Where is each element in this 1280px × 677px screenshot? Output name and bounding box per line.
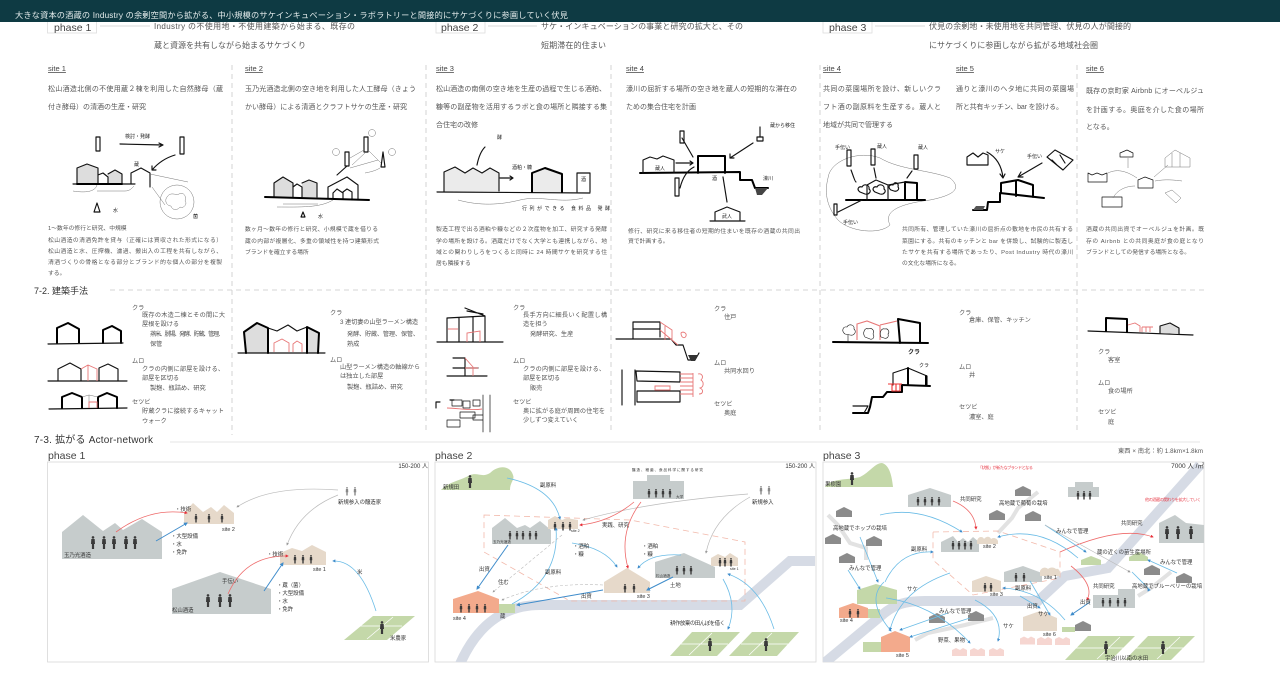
phase 3 site 4 sketch: 手伝い: [835, 144, 850, 151]
site 3 description: 松山酒造の南側の空き地を生産の過程で生じる酒粕、: [436, 84, 606, 93]
method text: site 3: 少しずつ変えていく: [523, 416, 578, 424]
building: 松山酒造: [172, 572, 271, 614]
site 1 notes: 1〜数年の修行と研究、中規模: [48, 224, 127, 232]
method sketch: phase 3 site 6: [1088, 318, 1193, 335]
site 1 notes: [48, 224, 222, 277]
scale note: 東西 × 南北：約 1.8km×1.8km: [1118, 447, 1203, 455]
river: [822, 465, 1200, 665]
flow labels: ・糠: [642, 550, 653, 558]
site buildings: [839, 536, 1148, 656]
phase 3 site 6 description: を計画する。奥庭を介した食の場所: [1086, 105, 1204, 114]
flow labels: [833, 495, 1203, 659]
site 4 notes: [628, 227, 800, 245]
building: site 2: site 2: [571, 529, 580, 533]
site 3 sketch: 行列ができる 食料品 発酵: [522, 205, 610, 212]
site 2 sketch: 水: [318, 213, 323, 220]
method text: site 3: クラ: [513, 305, 525, 312]
resource labels: ・技術: [267, 550, 284, 558]
flow labels: 実践、研究: [602, 521, 630, 529]
small houses: [825, 486, 1192, 631]
resource labels: ・免許: [277, 605, 294, 613]
method text: site 3: クラの内側に部屋を設ける、: [523, 365, 605, 373]
resource labels: ・技術: [175, 505, 192, 513]
phase 3 site 5 description: site 5: [956, 64, 974, 73]
building: site 1: [280, 545, 326, 573]
method text: phase 3 site 5: 濃室、庭: [969, 413, 994, 421]
phase 3 site 4 sketch: [826, 143, 956, 231]
method text: site 3: ムロ: [513, 358, 525, 365]
field: 米農家: [344, 616, 415, 642]
building: 玉乃光酒造: [492, 518, 551, 544]
flow labels: site 4: [840, 618, 853, 624]
building: 大学: 醸造、細菌、食品科学に関する研究: [632, 467, 703, 472]
method text: site 1: 屋根を設ける: [142, 320, 179, 328]
site 2 notes: 数ヶ月〜数年の修行と研究、小規模で蔵を借りる: [245, 225, 378, 233]
method text: phase 3 site 6: ムロ: [1098, 380, 1110, 387]
method text: site 2: 製麹、瓶詰め、研究: [347, 383, 403, 391]
site 2 sketch: [265, 130, 396, 220]
phase 3 site 4 sketch: 手伝い: [843, 219, 858, 226]
hill: 新規田: 新規田: [443, 483, 459, 491]
flow labels: サケ: [1038, 611, 1049, 618]
method text: site 1: クラ: [132, 305, 144, 312]
resource labels: ・水: [171, 540, 182, 548]
heading: 7-3: 7-3. 拡がる Actor-network: [34, 433, 154, 446]
building: 松山酒造: [655, 553, 715, 578]
site 2 notes: ブランドを確立する場所: [245, 248, 309, 256]
building: 大学: 大学: [676, 494, 684, 499]
hill: 果樹園: [825, 463, 893, 488]
panel: phase 3 network: [822, 450, 1204, 665]
flow labels: ・酒粕: [642, 542, 658, 550]
method text: site 4: クラ: [714, 306, 726, 313]
title bar: [0, 0, 1280, 22]
phase 3 site 6 description: となる。: [1086, 123, 1114, 131]
phase 3 site 4 sketch: 蔵人: [918, 144, 928, 151]
phase 3 site 4 description: フト酒の副原料を生産する。蔵人と: [823, 102, 941, 111]
method text: site 1: 蒸米、脱場、発酵、貯蔵、管理、: [150, 330, 224, 338]
terraced paths: [828, 492, 1171, 640]
resource labels: 米: [357, 568, 363, 576]
site 4 sketch: 酒: [712, 175, 717, 182]
site 1 notes: 松山酒造の清酒免許を貸与（正確には買収された形式になる）: [48, 236, 222, 244]
method text: site 3: 奥に拡がる庭が周囲の住宅を: [523, 407, 605, 415]
method text: phase 3 site 5: クラ: [959, 310, 971, 317]
site 4 sketch: 蔵人: [655, 165, 665, 172]
site 2 description: かい酵母）による清酒とクラフトサケの生産・研究: [245, 102, 407, 111]
method sketches: site 3: [436, 308, 503, 432]
phase 2 header: [436, 18, 743, 50]
method text: site 2: クラ: [330, 310, 342, 317]
hill: 果樹園: 果樹園: [825, 480, 841, 488]
method text: site 1: 貯蔵クラに接続するキャット: [142, 407, 224, 415]
flow labels: site 5: [896, 653, 909, 659]
fields: [1065, 636, 1195, 662]
phase 3 site 4 description: [823, 64, 941, 129]
site 4 sketch: 武人: [722, 213, 732, 220]
heading: 7-2: 7-2. 建築手法: [34, 285, 88, 296]
phase 2 header: phase 2: [441, 22, 479, 34]
site 4 description: site 4: [626, 64, 644, 73]
site 1 description: 松山酒造北側の不使用蔵２棟を利用した自然酵母（蔵: [48, 84, 223, 93]
site 2 description: 玉乃光酒造北側の空き地を利用した人工酵母（きょう: [245, 84, 416, 93]
site 3 notes: 域との関わりしろをつくると同時に 24 時間サケを研究する住: [436, 248, 607, 256]
flow labels: 共同研究: [1093, 582, 1115, 590]
phase 3 site 4 description: site 4: [823, 64, 841, 73]
method text: phase 3 site 6: 食の場所: [1108, 387, 1133, 395]
method text: site 3: 販売: [530, 384, 542, 392]
hill: 新規田: [441, 467, 513, 491]
panel: phase 2 network: phase 2: [435, 450, 473, 462]
phase 3 site 6 notes: ブランドとしての発信する場所となる。: [1086, 248, 1190, 256]
building: 松山酒造: 手伝い: [222, 577, 238, 585]
phase 3 site 5 notes: の文化な場所になる。: [902, 259, 960, 267]
flow labels: みんなで管理: [849, 564, 882, 572]
panel: phase 3 network: 「状態」が新たなブランドとなる: [978, 464, 1033, 471]
building: site 2: [548, 516, 580, 533]
flow labels: みんなで管理: [939, 607, 972, 615]
method text: site 1: ウォーク: [142, 417, 167, 425]
phase 3 site 4 description: 共同の菜園場所を設け、新しいクラ: [823, 84, 941, 93]
panel: phase 3 network: phase 3: [823, 450, 861, 462]
site 3 notes: 製造工程で出る酒粕や糠などの２次産物を加工、研究する発酵: [436, 225, 607, 233]
flow labels: site 3: [990, 592, 1003, 598]
site 4 sketch: 濠川: [763, 175, 773, 182]
phase 3 site 5 notes: 共同所有、管理していた濠川の屈折点の敷地を市民の共有する: [902, 225, 1073, 233]
building: site 1: site 1: [313, 567, 326, 573]
method text: site 2: ムロ: [330, 357, 342, 364]
method text: site 2: 熟成: [347, 340, 359, 348]
method text: site 4: セツビ: [714, 400, 733, 408]
network arrows: [116, 489, 376, 611]
site 4 sketch: 蔵から移住: [770, 122, 795, 129]
building: 松山酒造: 松山酒造: [172, 606, 194, 614]
phase 1 header: [48, 18, 355, 50]
building: 松山酒造: 松山酒造: [656, 573, 671, 578]
phase 3 site 5 notes: たサケを共有する場所であったり、Post Industry 時代の濠川: [902, 248, 1073, 256]
panel: phase 2 network: [435, 450, 816, 664]
resource labels: ・大型設備: [277, 589, 305, 597]
flow labels: ・酒粕: [573, 542, 589, 550]
dashed boundary: [933, 531, 1060, 595]
fields: 宇治川以南の水田: [1105, 654, 1148, 662]
site 1 sketch: 蔵: [134, 161, 139, 168]
phase 3 site 6 description: [1086, 64, 1204, 131]
flow labels: 蔵の近くの苗生産場所: [1097, 548, 1152, 556]
site 1 sketch: 水: [113, 207, 118, 214]
method text: site 1: ムロ: [132, 358, 144, 365]
people: 新規参入: 新規参入: [752, 498, 774, 506]
field: 米農家: 米農家: [390, 634, 407, 642]
flow labels: 住む: [498, 578, 509, 586]
site 1 notes: 松山酒造と水、圧搾機、濾過、搬出入の工程を共有しながら、: [48, 247, 222, 255]
site 4 notes: 資で計画する。: [628, 237, 669, 245]
building: site 1: [711, 553, 739, 571]
flow labels: みんなで管理: [1056, 527, 1089, 535]
method text: site 4: [714, 306, 755, 417]
flow labels: ・糠: [573, 550, 584, 558]
site 2 description: [245, 64, 416, 111]
method text: site 3: セツビ: [513, 398, 532, 406]
phase 1 header: 蔵と資源を共有しながら始まるサケづくり: [154, 40, 306, 50]
site 3 description: [436, 64, 607, 129]
flow labels: 出資: [1027, 602, 1038, 610]
panel: phase 2 network: 150-200 人: [785, 463, 815, 470]
site 3 sketch: 酵: [497, 135, 502, 141]
phase 3 site 6 notes: 存の Airbnb との共同奥庭が食の庭となり: [1086, 237, 1204, 245]
resource labels: ・大型設備: [171, 532, 199, 540]
phase 3 header: [823, 18, 1131, 50]
flow labels: 副原料: [911, 545, 928, 553]
site 1 sketch: 菌: [193, 213, 198, 220]
phase 3 site 6 sketch: [1088, 150, 1190, 207]
phase 3 site 6 description: site 6: [1086, 64, 1104, 73]
phase 3 header: 伏見の余剰地・未使用地を共同管理、伏見の人が間接的: [929, 21, 1131, 31]
method text: site 3: 長手方向に細長いく配置し構: [523, 311, 607, 319]
title bar: 大きな資本の酒蔵の Industry の余剰空間から拡がる、中小規模のサケインキュベーション・ラボラトリーと間接的にサケづくりに参画していく伏見: [15, 10, 568, 20]
phase 3 site 4 sketch: 蔵人: [877, 143, 887, 150]
phase 3 site 5 sketch: サケ: [995, 148, 1005, 155]
building: site 4: site 4: [453, 616, 466, 622]
method text: site 2: 3 連切妻の山型ラーメン構造: [340, 318, 418, 326]
耕作地 dashed boundary: [484, 515, 745, 601]
phase 3 site 5 notes: 菜園にする。共有のキッチンと bar を併設し、試験的に製造し: [902, 237, 1073, 245]
building: 玉乃光酒造: 玉乃光酒造: [64, 551, 92, 559]
method sketches: phase 3 site 5: クラ: [919, 363, 929, 369]
site 2 notes: 蔵の内部が複層化、多重の領域性を持つ建築形式: [245, 237, 379, 245]
site 4 description: 濠川の屈折する場所の空き地を蔵人の短期的な滞在の: [626, 84, 797, 93]
fields: [670, 632, 799, 656]
site 4 description: [626, 64, 797, 111]
site 3 description: 合住宅の改修: [436, 120, 478, 129]
building: site 2: [184, 503, 235, 533]
method text: phase 3 site 5: 倉庫、保管、キッチン: [969, 316, 1031, 324]
phase 3 site 5 sketch: [967, 148, 1073, 210]
method text: phase 3 site 6: 客室: [1108, 356, 1120, 364]
panel: phase 1 network: 150-200 人: [398, 463, 428, 470]
site 4 sketch: [640, 122, 795, 221]
method text: site 2: は独立した部屋: [340, 372, 383, 380]
site 3 notes: 居も隣接する: [436, 259, 471, 267]
panel: phase 1 network: [48, 450, 428, 662]
building: 玉乃光酒造: [62, 515, 162, 559]
panel: phase 1 network: phase 1: [48, 450, 86, 462]
site 1 description: site 1: [48, 64, 66, 73]
method text: phase 3 site 5: [959, 310, 1031, 421]
site 3 description: site 3: [436, 64, 454, 73]
method text: site 1: 既存の木造二棟とその間に大: [142, 311, 225, 319]
flow labels: site 6: [1043, 632, 1056, 638]
flow labels: site 1: [1044, 575, 1057, 581]
method text: site 1: [132, 305, 225, 425]
site 1 description: [48, 64, 223, 111]
method text: site 2: 山型ラーメン構造の軸線から: [340, 363, 420, 371]
phase 2 header: サケ・インキュベーションの事業と研究の拡大と、その: [541, 21, 743, 31]
method text: site 1: 部屋を区切る: [142, 374, 179, 382]
site 1 sketch: 検討・発酵: [125, 133, 150, 140]
flow labels: 共同研究: [960, 495, 982, 503]
phase 3 site 5 description: 通りと濠川のヘタ地に共同の菜園場: [956, 84, 1074, 93]
method text: phase 3 site 6: セツビ: [1098, 408, 1117, 416]
phase 2 header: 短期滞在的住まい: [541, 40, 606, 50]
resource labels: [171, 505, 363, 613]
method text: site 2: 発酵、貯蔵、管理、保管、: [347, 330, 419, 338]
flow labels: site 2: [983, 544, 996, 550]
buildings: partner breweries: [908, 482, 1204, 608]
building: site 3: [604, 568, 650, 600]
flow labels: [479, 481, 725, 627]
site 2 notes: [245, 225, 379, 256]
flow labels: 副原料: [545, 568, 562, 576]
building: 大学: [632, 467, 703, 499]
method text: phase 3 site 5: ムロ: [959, 364, 971, 371]
method text: phase 3 site 5: 井: [969, 371, 975, 379]
river: [460, 561, 815, 664]
method text: phase 3 site 6: クラ: [1098, 349, 1110, 356]
network arrows: [848, 501, 1177, 643]
phase 3 site 5 description: 所と共有キッチン、bar を設ける。: [956, 102, 1063, 111]
site 3 sketch: 酒: [581, 176, 586, 183]
site 3 notes: [436, 225, 607, 267]
site 1 notes: 清酒づくりの骨格となる部分とブランド的な個人の部分を複製: [48, 258, 222, 266]
method text: phase 3 site 6: 庭: [1108, 418, 1114, 426]
method text: site 1: クラの内側に部屋を設ける、: [142, 365, 224, 373]
method text: site 1: 保管: [150, 340, 162, 348]
flow labels: 副原料: [540, 481, 557, 489]
people: 新規参入: [752, 486, 774, 506]
building: site 3: site 3: [637, 594, 650, 600]
method sketches: site 1: [48, 323, 127, 409]
resource labels: ・免許: [171, 548, 188, 556]
method text: site 2: [330, 310, 420, 391]
phase 3 site 5 sketch: 手伝い: [1027, 153, 1042, 160]
method text: site 3: 造を担う: [523, 320, 548, 328]
site 2 description: site 2: [245, 64, 263, 73]
building: site 2: site 2: [222, 527, 235, 533]
flow labels: サケ: [1003, 623, 1014, 630]
flow labels: 土地: [670, 581, 681, 589]
building: 玉乃光酒造: 玉乃光酒造: [493, 539, 511, 544]
phase 3 site 4 description: 地域が共同で管理する: [823, 120, 893, 129]
method sketches: phase 3 site 5: [833, 319, 930, 413]
people: 新規参入: 新規参入の醸造家: [338, 498, 382, 506]
method text: site 4: 共同水回り: [724, 367, 755, 375]
method sketch: site 2: [238, 323, 325, 353]
flow labels: 高地蔵でブルーベリーの栽培: [1132, 582, 1203, 590]
method text: site 4: ムロ: [714, 360, 726, 367]
method text: site 4: 住戸: [724, 313, 736, 321]
flow labels: 出資: [1080, 598, 1091, 606]
phase 3 header: にサケづくりに参画しながら拡がる地域社会圏: [929, 40, 1098, 50]
phase 3 site 5 description: [956, 64, 1074, 111]
method text: site 3: 発酵研究、生産: [530, 330, 573, 338]
flow labels: 共同研究: [1121, 519, 1143, 527]
panel: phase 3 network: 他の酒蔵の関わりを拡大していく: [1145, 496, 1201, 503]
method text: site 3: 部屋を区切る: [523, 374, 560, 382]
site 1 description: 付き酵母）の清酒の生産・研究: [48, 102, 146, 111]
flow labels: 野菜、果物: [938, 636, 966, 644]
method text: site 1: セツビ: [132, 398, 151, 406]
site 3 sketch: [437, 135, 610, 212]
flow labels: 高地蔵で葡萄の栽培: [999, 499, 1048, 507]
resource labels: ・蔵（菌）: [277, 581, 304, 589]
method text: phase 3 site 5: セツビ: [959, 403, 978, 411]
site 1 notes: する。: [48, 270, 65, 277]
phase 3 site 6 notes: [1086, 225, 1204, 256]
phase 3 site 6 notes: 酒蔵の共同出資でオーベルジュを計画。既: [1086, 225, 1204, 233]
phase 3 site 6 description: 既存の京町家 Airbnb にオーベルジュ: [1086, 86, 1204, 95]
phase 1 header: Industry の不使用地・不使用建築から始まる、既存の: [154, 21, 355, 31]
flow labels: 高地蔵でホップの栽培: [833, 524, 888, 532]
panel: phase 3 network: 7000 人 /㎡: [1171, 461, 1204, 470]
phase 3 header: phase 3: [829, 22, 867, 34]
building: site 4: 蔵: [500, 612, 506, 620]
site 3 notes: 学の場所を設ける。酒蔵だけでなく大学とも連携しながら、地: [436, 237, 607, 245]
site 4 notes: 修行、研究に来る移住者の短期的住まいを既存の酒蔵の共同出: [628, 227, 800, 235]
method text: phase 3 site 6: [1098, 349, 1133, 426]
people: 新規参入: [338, 487, 382, 506]
network arrows: [477, 478, 774, 629]
flow labels: 耕作放棄の田んぼを借く: [670, 619, 725, 627]
site 1 sketch: [73, 133, 198, 220]
flow labels: 出資: [581, 592, 592, 600]
method text: site 3: [513, 305, 607, 424]
flow labels: みんなで管理: [1160, 558, 1193, 566]
site 3 description: 糠等の副産物を活用するラボと食の場所と隣接する集: [436, 102, 607, 111]
method text: site 4: 奥庭: [724, 409, 736, 417]
method sketches: phase 3 site 5: クラ: [908, 348, 920, 356]
phase 3 site 5 notes: [902, 225, 1073, 267]
site 3 sketch: 酒粕・糠: [512, 164, 532, 171]
flow labels: 出資: [479, 565, 490, 573]
building: site 4: [453, 591, 515, 622]
building: site 1: site 1: [730, 567, 739, 571]
phase 1 header: phase 1: [54, 22, 92, 34]
flow labels: サケ: [907, 586, 918, 593]
method sketches: site 4: [616, 322, 703, 405]
method text: site 1: 製麹、瓶詰め、研究: [150, 384, 206, 392]
site 4 description: ための集合住宅を計画: [626, 102, 696, 111]
resource labels: ・水: [277, 597, 288, 605]
flow labels: 副原料: [1015, 584, 1032, 592]
